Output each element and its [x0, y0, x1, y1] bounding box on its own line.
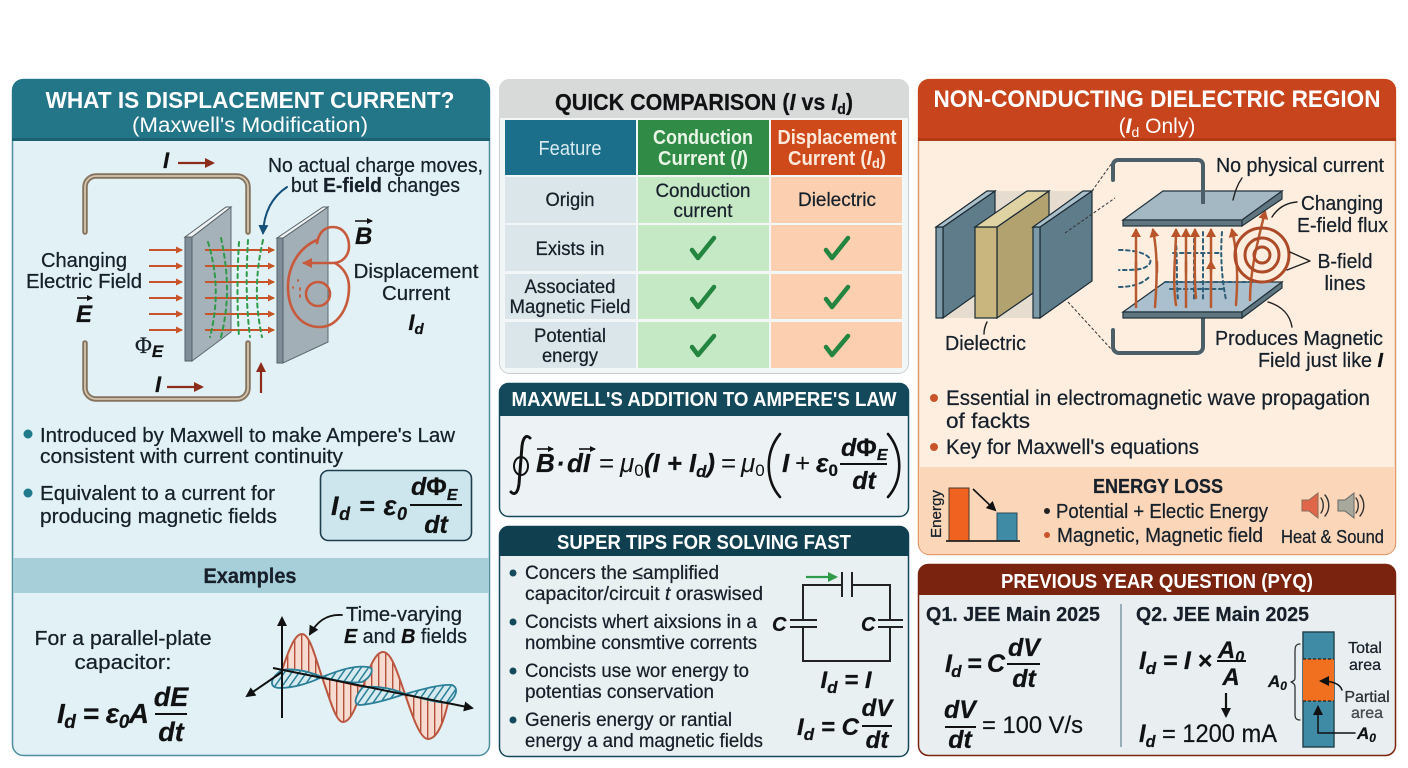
tip 1: capacitor/circuit t oraswised	[525, 584, 763, 605]
dashed zoom lines	[1065, 163, 1115, 350]
formula: Ampere-Maxwell law: ·	[556, 448, 565, 478]
label: no physical current: No physical current	[1216, 155, 1384, 177]
formula: Id = I x A0/A: I	[1139, 647, 1146, 675]
label: B-field lines: B-field	[1318, 251, 1372, 273]
table header row: Displacement	[778, 127, 897, 149]
formula: Id = I: d	[827, 678, 838, 697]
wires	[1113, 160, 1203, 353]
formula: Ampere-Maxwell law: μ	[741, 448, 755, 478]
heading: quick comparison: QUICK COMPARISON (I vs I	[555, 89, 838, 115]
question 1	[926, 604, 1100, 754]
label: time-varying E and B fields	[310, 604, 467, 648]
row: origin	[505, 177, 902, 223]
bullet: essential in wave propagation	[930, 387, 1370, 433]
row: origin: Dielectric	[798, 190, 876, 211]
subheader: examples: Examples	[204, 565, 296, 588]
diagram: partial area strip: 0	[1369, 731, 1376, 745]
formula: Ampere-Maxwell law: dI	[567, 448, 591, 478]
chart: electromagnetic wave	[247, 618, 472, 739]
formula: Id = I x A0/A: A	[1221, 664, 1240, 691]
tip 4	[510, 710, 763, 752]
formula: Id = I x A0/A	[1139, 637, 1246, 691]
table header row: d	[872, 155, 880, 171]
tip 2: nombine consmtive corrents	[525, 633, 757, 654]
table header row	[505, 120, 902, 175]
diagram: partial area strip: area	[1349, 657, 1381, 674]
label: displacement current: Displacement	[354, 261, 479, 283]
formula: Ampere-Maxwell law: d	[696, 462, 707, 481]
label: top current I: I	[163, 148, 170, 173]
formula: Id = C dV/dt	[945, 634, 1042, 693]
diagram: partial area strip	[1267, 632, 1390, 747]
heading: non-conducting dielectric region: NON-CONDUCTING DIELECTRIC REGION	[934, 86, 1380, 113]
heading: non-conducting dielectric region: d	[1132, 124, 1139, 140]
formula: dV/dt = 100 V/s: dt	[948, 726, 973, 754]
header: what is displacement current	[12, 79, 490, 141]
formula: dV/dt = 100 V/s	[944, 696, 1083, 754]
diagram: capacitor with dielectric slab	[936, 191, 1092, 318]
formula: Id = C dV/dt: = C	[961, 650, 1006, 678]
diagram: partial area strip: area	[1351, 705, 1383, 722]
text: for a parallel-plate capacitor: capacitor:	[74, 652, 172, 674]
heading: quick comparison	[499, 79, 909, 118]
formula: Ampere-Maxwell law: dt	[852, 467, 877, 495]
heading: quick comparison: )	[846, 89, 853, 115]
callout: no actual charge moves: No actual charge moves,	[268, 155, 483, 177]
formula: Ampere-Maxwell law: ε	[816, 448, 828, 478]
formula box: Id = e0 dPhi/dt: I	[331, 491, 339, 521]
label: displacement current: I	[408, 310, 414, 335]
diagram: partial area strip: Total	[1348, 640, 1382, 657]
row: potential energy: energy	[542, 346, 598, 367]
panel: non-conducting dielectric region	[918, 79, 1396, 554]
row: exists in: Exists in	[536, 239, 604, 260]
tip 4: energy a and magnetic fields	[525, 731, 763, 752]
heading: energy loss: ENERGY LOSS	[1093, 476, 1223, 498]
label: changing electric field: Changing	[41, 250, 127, 272]
heading: Maxwell's addition: MAXWELL'S ADDITION TO AMPERE'S LAW	[512, 389, 897, 411]
subheader: examples	[13, 558, 489, 593]
table header row: Conduction	[653, 127, 753, 149]
formula box: Id = e0 dPhi/dt: dΦ	[411, 473, 447, 501]
row: associated magnetic field: Associated	[524, 277, 616, 298]
row: origin: current	[674, 201, 733, 222]
circuit diagram: C	[861, 614, 876, 636]
label: heat and sound: Heat & Sound	[1281, 527, 1384, 547]
formula: Id = I: I	[820, 667, 827, 694]
label: changing E-field flux: E-field flux	[1297, 215, 1388, 237]
bullet: introduced by Maxwell	[24, 425, 456, 468]
panel: super tips for solving fast	[499, 526, 909, 756]
label: changing E-field flux	[1272, 193, 1388, 237]
tip 1	[510, 563, 763, 605]
label: displacement current: Current	[382, 283, 450, 305]
bullet: equivalent to a current: Equivalent to a current for	[40, 483, 275, 505]
bullet: equivalent to a current: producing magnetic fields	[40, 506, 277, 528]
dashed blue field lines	[1119, 232, 1258, 300]
panel: quick comparison	[499, 79, 909, 374]
diagram: partial area strip: A	[1268, 672, 1280, 691]
formula: Id = e0 A dE/dt: I	[57, 698, 65, 729]
label: produces magnetic field: Field just like I	[1258, 350, 1383, 372]
formula: Id = 1200 mA: I	[1139, 720, 1147, 748]
field lines	[1136, 212, 1265, 307]
contour integral	[511, 436, 530, 494]
diagram: partial area strip: Partial	[1344, 689, 1390, 706]
formula: Id = e0 A dE/dt: d	[64, 712, 76, 733]
tip 1: Concers the ≤amplified	[525, 563, 719, 584]
label: time-varying E and B fields: E and B fields	[344, 626, 467, 648]
divider between questions	[1120, 604, 1122, 747]
formula: Ampere-Maxwell law: B	[536, 448, 555, 478]
table header row: Current (I)	[658, 148, 748, 170]
table: comparison	[505, 120, 902, 368]
row: origin: Conduction	[656, 181, 750, 202]
formula: Ampere-Maxwell law: dΦ	[841, 434, 877, 462]
label: B-field lines	[1287, 251, 1372, 295]
heading: super tips	[499, 526, 909, 556]
label: bottom current I: I	[155, 372, 162, 397]
formula: Id = I x A0/A: = I ×	[1156, 647, 1212, 675]
formula box: Id = e0 dPhi/dt: = ε	[351, 491, 397, 521]
label: changing electric field: E	[76, 301, 93, 328]
arrow: up current	[260, 364, 262, 393]
circuit diagram	[772, 572, 903, 661]
label: magnetic field B: B	[355, 223, 372, 250]
formula: Ampere-Maxwell law: +	[795, 448, 810, 478]
label: dielectric: Dielectric	[945, 333, 1026, 355]
bullet: introduced by Maxwell: consistent with current continuity	[40, 446, 343, 468]
question 2: Q2. JEE Main 2025	[1136, 604, 1309, 626]
section: energy loss	[919, 467, 1395, 554]
label: no physical current	[1216, 155, 1384, 200]
tip 3: Concists use wor energy to	[525, 661, 749, 682]
label: time-varying E and B fields: Time-varying	[346, 604, 462, 626]
formula: Id = C dV/dt: dt	[866, 727, 889, 754]
list: energy loss items	[1044, 501, 1268, 547]
electric field arrows	[149, 250, 274, 330]
row: exists in	[505, 225, 902, 271]
icon: speakers	[1302, 493, 1364, 518]
formula box: Id = e0 dPhi/dt: E	[447, 487, 459, 504]
tip 2: Concists whert aixsions in a	[525, 612, 757, 633]
formula box: Id = e0 dPhi/dt: dt	[424, 511, 449, 539]
formula: Id = C dV/dt: dV	[1008, 634, 1042, 662]
row: associated magnetic field: Magnetic Field	[510, 297, 630, 318]
formula box: Id = e0 dPhi/dt: 0	[397, 504, 407, 524]
label: B-field lines: lines	[1324, 273, 1366, 295]
panel: previous year question	[918, 564, 1396, 756]
formula: Ampere-Maxwell law: )	[703, 448, 715, 478]
bullet: introduced by Maxwell: Introduced by Maxwell to make Ampere's Law	[40, 425, 456, 447]
heading: non-conducting dielectric region: Only)	[1139, 115, 1195, 138]
formula: Ampere-Maxwell law: 0	[755, 461, 765, 480]
formula: Id = I x A0/A: A	[1218, 637, 1235, 664]
formula: Id = I: = I	[838, 667, 873, 694]
bullet: essential in wave propagation: of fackts	[946, 410, 1030, 433]
formula: Id = C dV/dt	[797, 695, 894, 754]
left plate	[185, 207, 231, 361]
formula: dV/dt = 100 V/s: dV	[944, 696, 978, 724]
table header row: Feature	[538, 138, 602, 160]
formula: Ampere-Maxwell law: (I + I	[644, 448, 697, 478]
green displacement lines	[208, 238, 263, 337]
formula: Ampere-Maxwell law: E	[877, 447, 889, 464]
label: changing electric field: Electric Field	[26, 271, 142, 293]
diagram: plates with field lines	[1113, 160, 1289, 353]
formula: Id = C dV/dt: d	[951, 662, 962, 681]
formula: Id = C dV/dt: d	[804, 725, 815, 744]
formula: Id = C dV/dt: dV	[862, 695, 894, 722]
row: potential energy	[505, 322, 902, 368]
formula: Id = C dV/dt: I	[945, 650, 952, 678]
wires	[85, 176, 248, 399]
formula: Id = C dV/dt: dt	[1012, 665, 1037, 693]
diagram: parallel plate capacitor with changing field	[26, 148, 483, 399]
right plate	[277, 207, 328, 363]
diagram: partial area strip: 0	[1280, 679, 1287, 693]
arrow: down	[1225, 693, 1227, 716]
list: energy loss items: Potential + Electic Energy	[1056, 501, 1268, 523]
formula: Id = e0 A dE/dt: 0	[119, 712, 130, 733]
formula: Ampere-Maxwell law: μ	[620, 448, 634, 478]
row: associated magnetic field	[505, 274, 902, 319]
formula box: Id = e0 dPhi/dt	[320, 470, 472, 540]
question 1: Q1. JEE Main 2025	[926, 604, 1100, 626]
label: produces magnetic field	[1215, 302, 1383, 372]
formula: Id = I x A0/A: 0	[1235, 649, 1244, 666]
callout: no actual charge moves: but E-field changes	[291, 175, 460, 197]
formula: Id = e0 A dE/dt: dE	[154, 682, 189, 712]
formula box: Id = e0 dPhi/dt: d	[339, 504, 351, 524]
label: electric flux: E	[152, 342, 164, 361]
upper plate	[1123, 165, 1282, 226]
formula: Ampere-Maxwell law	[511, 434, 899, 497]
formula: Id = 1200 mA: d	[1146, 732, 1156, 751]
tip 3	[510, 661, 749, 703]
text: for a parallel-plate capacitor: For a parallel-plate	[34, 628, 212, 650]
formula: Ampere-Maxwell law: I	[782, 448, 790, 478]
panel: what is displacement current	[12, 79, 490, 756]
label: bottom current I	[155, 372, 202, 397]
label: changing electric field	[26, 250, 142, 328]
heading: super tips: SUPER TIPS FOR SOLVING FAST	[557, 532, 851, 554]
lower plate	[1123, 282, 1282, 318]
formula: dV/dt = 100 V/s: = 100 V/s	[982, 712, 1083, 739]
label: produces magnetic field: Produces Magnetic	[1215, 328, 1383, 350]
formula: Ampere-Maxwell law: 0	[634, 461, 644, 480]
formula: Id = e0 A dE/dt: A	[128, 698, 149, 729]
formula: Id = C dV/dt: = C	[814, 714, 860, 741]
row: potential energy: Potential	[534, 326, 606, 347]
label: electric flux: Φ	[135, 333, 152, 358]
label: dielectric	[945, 322, 1026, 355]
bullet: equivalent to a current	[24, 483, 277, 528]
header: what is displacement current: WHAT IS DISPLACEMENT CURRENT?	[46, 87, 454, 113]
formula: Id = C dV/dt: I	[797, 714, 804, 741]
text: for a parallel-plate capacitor	[34, 628, 212, 674]
formula: Ampere-Maxwell law: =	[721, 448, 736, 478]
label: displacement current	[354, 261, 479, 338]
chart: energy bars	[928, 488, 1020, 541]
tip 3: potentias conservation	[525, 682, 714, 703]
diagram: partial area strip: A	[1357, 724, 1369, 743]
panel: Maxwell's addition to Ampere's law	[499, 383, 909, 516]
bullet: essential in wave propagation: Essential in electromagnetic wave propagation	[946, 387, 1370, 410]
heading: non-conducting dielectric region	[918, 79, 1396, 141]
magnetic field loops	[288, 227, 349, 327]
tip 2	[510, 612, 757, 654]
list: energy loss items: Magnetic, Magnetic field	[1057, 525, 1263, 547]
heading: previous year question	[918, 564, 1396, 595]
formula: Id = I x A0/A: d	[1146, 659, 1157, 678]
formula: Ampere-Maxwell law: 0	[828, 461, 838, 480]
heading: non-conducting dielectric region: (I	[1119, 115, 1132, 138]
label: displacement current: d	[414, 321, 424, 338]
header: what is displacement current: (Maxwell's Modification)	[132, 114, 368, 137]
tip 4: Generis energy or rantial	[525, 710, 732, 731]
question 2	[1136, 604, 1390, 751]
heading: quick comparison: d	[837, 101, 846, 118]
chart: energy bars: Energy	[928, 489, 945, 538]
formula: Ampere-Maxwell law: =	[599, 448, 614, 478]
formula: Id = e0 A dE/dt: dt	[158, 717, 185, 747]
formula: Id = e0 A dE/dt	[57, 682, 189, 747]
magnetic field circles	[1235, 228, 1289, 282]
formula: Id = 1200 mA: = 1200 mA	[1155, 720, 1277, 748]
circuit diagram: C	[772, 614, 787, 636]
heading: Maxwell's addition	[499, 383, 909, 416]
callout: no actual charge moves	[263, 155, 483, 233]
label: top current I	[163, 148, 213, 173]
table header row: )	[880, 148, 886, 170]
table header row: Current (I	[788, 148, 872, 170]
label: changing E-field flux: Changing	[1301, 193, 1383, 215]
bullet: key for Maxwell's equations: Key for Maxwell's equations	[946, 436, 1199, 459]
heading: previous year question: PREVIOUS YEAR QUESTION (PYQ)	[1001, 571, 1313, 593]
row: origin: Origin	[546, 190, 594, 211]
formula: Id = e0 A dE/dt: = ε	[75, 698, 120, 729]
